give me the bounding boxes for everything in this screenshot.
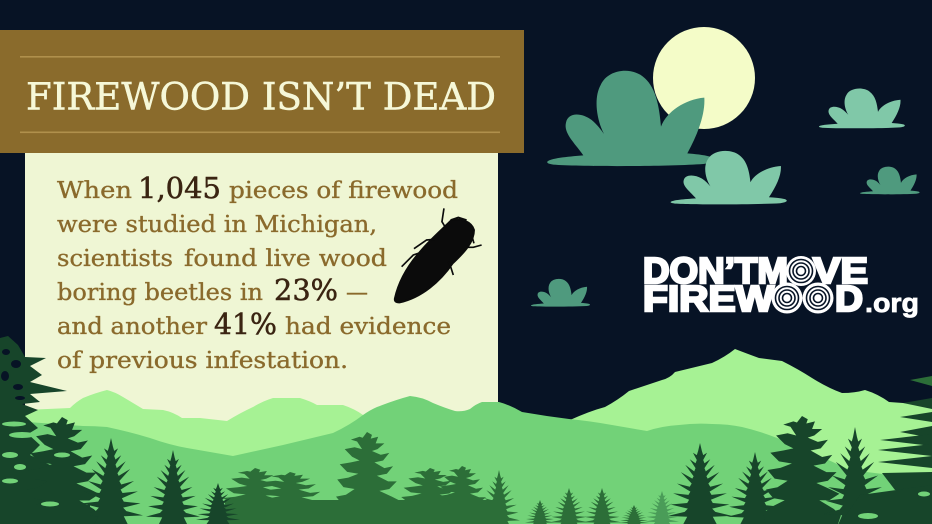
- body text block: —: [346, 280, 368, 306]
- tree: pine 499: [478, 470, 520, 524]
- icon: beetle silhouette: [395, 208, 482, 302]
- trees: dark foreground forest: [0, 336, 932, 524]
- body text block: [57, 171, 458, 374]
- tree: pine 700: [668, 443, 732, 524]
- body text block: of previous infestation.: [57, 348, 348, 374]
- tree: pine 634: [619, 505, 649, 524]
- tree: pine 755: [727, 452, 783, 524]
- body text block: 1,045: [138, 171, 221, 205]
- body text block: pieces of firewood: [229, 178, 458, 204]
- tree: pine 540: [525, 500, 555, 524]
- cloud: large dark green: [547, 71, 713, 166]
- tree: deciduous group left of centre: [219, 468, 291, 524]
- title: FIREWOOD ISN’T DEAD: [26, 76, 496, 118]
- trees: mid-green background forest: [219, 432, 649, 524]
- mountain: right light range: [570, 349, 932, 524]
- logo: Don't Move Firewood.org: DON’TM: [643, 250, 788, 291]
- cloud: small right dark green: [860, 167, 920, 194]
- tree: pine 569: [550, 488, 588, 524]
- tree: pine 855: [823, 427, 887, 524]
- text panel background: [25, 150, 498, 430]
- cloud: medium light green: [671, 151, 787, 204]
- body text block: boring beetles in: [57, 280, 263, 306]
- tree: pine 602: [583, 488, 621, 524]
- moon: [653, 27, 755, 129]
- tree: pine 173: [146, 450, 200, 524]
- body text block: and another: [57, 314, 207, 340]
- logo: Don't Move Firewood.org: .org: [865, 288, 919, 318]
- tree: big pine far right: [840, 376, 932, 524]
- logo: Don't Move Firewood.org: VE: [813, 250, 868, 291]
- body text block: 41%: [214, 307, 277, 341]
- cloud: upper right light green: [819, 89, 905, 128]
- forest floor mid-green: [225, 500, 495, 524]
- forest floor left: [0, 505, 90, 524]
- tree: tall deciduous centre: [334, 432, 400, 524]
- tree: pale pine: [645, 491, 679, 524]
- cloud: small lower left dark green: [531, 279, 590, 307]
- tree: big pine far left: [0, 336, 67, 524]
- logo: Don't Move Firewood.org: FIREW: [643, 278, 774, 319]
- body text block: 23%: [274, 273, 338, 307]
- tree: deciduous dark left: [23, 417, 101, 524]
- tree: pine 218: [196, 483, 240, 524]
- body text block: found live wood: [184, 246, 387, 272]
- mountain: middle green range: [0, 396, 932, 524]
- mountain: left light range: [25, 390, 420, 524]
- tree: deciduous dark right: [763, 416, 841, 524]
- tree: deciduous group centre left: [251, 472, 329, 524]
- tree: deciduous group centre: [398, 468, 462, 524]
- logo: Don't Move Firewood.org: D: [835, 278, 863, 319]
- header band: [0, 30, 524, 153]
- light gaps in the left and right foliage: [2, 422, 930, 519]
- tree: deciduous group centre right: [435, 466, 489, 524]
- body text block: had evidence: [285, 314, 451, 340]
- body text block: When: [57, 178, 132, 204]
- body text block: scientists: [57, 246, 173, 272]
- logo: Don't Move Firewood.org: [643, 250, 919, 319]
- body text block: were studied in Michigan,: [57, 212, 377, 238]
- tree: pine 111: [79, 438, 143, 524]
